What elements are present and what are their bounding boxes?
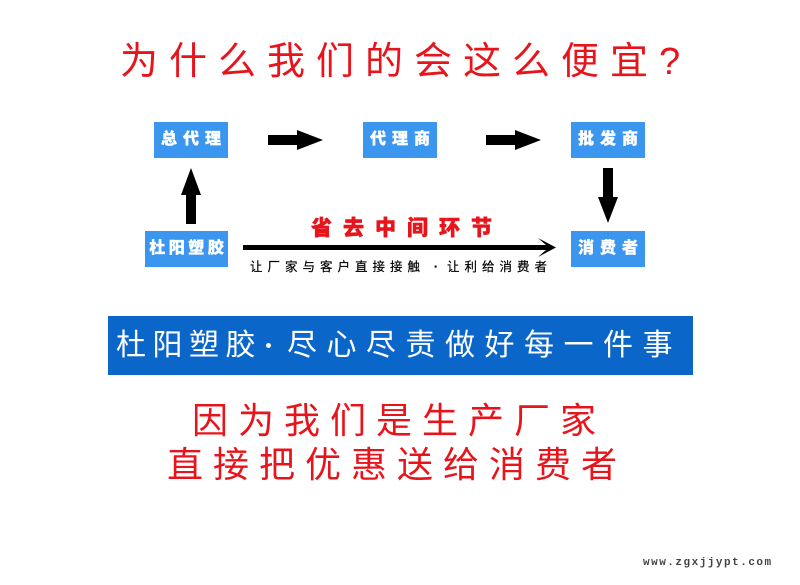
- box: 批发商: [571, 122, 645, 158]
- arrow: direct path to 消费者: [243, 238, 556, 257]
- box: 消费者: 消费者: [578, 240, 644, 257]
- banner dot: [266, 343, 271, 348]
- box: 总代理: [154, 122, 228, 158]
- box: 杜阳塑胶: 杜阳塑胶: [149, 240, 227, 257]
- title: 为什么我们的会这么便宜?: [120, 41, 691, 83]
- box: 杜阳塑胶: [145, 231, 228, 267]
- box: 消费者: [571, 231, 645, 267]
- box: 代理商: 代理商: [370, 131, 436, 148]
- caption: 让利: ·: [434, 260, 438, 274]
- banner text: 尽心尽责做好每一件事: 尽心尽责做好每一件事: [287, 329, 682, 362]
- heading: 省去中间环节: 省去中间环节: [311, 217, 503, 240]
- banner: [108, 316, 693, 375]
- closing line 2: 直接把优惠送给消费者: [167, 444, 627, 485]
- arrow: 总代理 to 代理商: [268, 130, 323, 150]
- box: 代理商: [363, 122, 437, 158]
- website url: www.zgxjjypt.com: [643, 557, 773, 569]
- arrow: 代理商 to 批发商: [486, 130, 541, 150]
- arrow: 杜阳塑胶 to 总代理: [181, 168, 201, 224]
- box: 总代理: 总代理: [161, 131, 227, 148]
- box: 批发商: 批发商: [578, 131, 644, 148]
- banner text: 杜阳塑胶: 杜阳塑胶: [116, 329, 262, 362]
- arrow: 批发商 to 消费者: [598, 168, 618, 223]
- caption: 让利: 让厂家与客户直接接触 让利给消费者: [250, 260, 552, 274]
- closing line 1: 因为我们是生产厂家: [192, 400, 606, 441]
